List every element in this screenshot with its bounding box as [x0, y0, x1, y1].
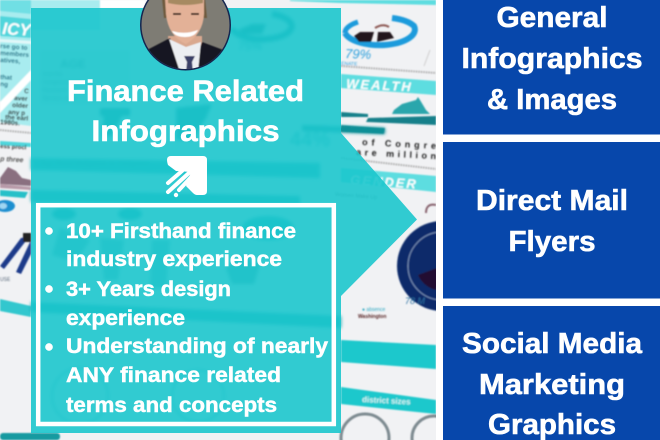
left top cyan block — [0, 0, 100, 126]
content under the teal panel: Congressional — [42, 80, 80, 86]
content under the teal panel: Service says — [42, 96, 76, 102]
bullet list: industry experience — [66, 248, 282, 271]
title: Finance Related — [67, 75, 304, 108]
background: blurred infographic collage: are million — [356, 147, 436, 161]
left column text: ng — [0, 81, 8, 89]
background: blurred infographic collage: 78 M — [405, 296, 426, 306]
background: blurred infographic collage: of Congre — [362, 137, 436, 151]
left column text: that — [0, 74, 13, 82]
left column text: aver — [14, 95, 28, 103]
panel: General Infographics and Images: General — [496, 2, 608, 34]
content under the teal panel: Top Three Religions in Congress — [40, 161, 150, 168]
photo: circular portrait — [140, 0, 232, 72]
panel: white outlined credentials box — [38, 205, 334, 424]
panel: General Infographics and Images: & Images — [487, 84, 617, 116]
content under the teal panel: 75% — [238, 39, 262, 53]
background: blurred infographic collage: ess procl — [0, 144, 27, 151]
dark pie — [396, 220, 436, 312]
background: blurred infographic collage: ● absence — [362, 307, 386, 313]
left column text: C — [24, 88, 29, 95]
left column text: members — [0, 50, 30, 59]
left column text: the earl — [5, 114, 29, 123]
panel: Social Media Marketing Graphics: Marketing — [479, 369, 625, 401]
capitol left — [0, 167, 31, 186]
capitol right — [341, 112, 368, 117]
bullet list: terms and concepts — [66, 394, 277, 417]
background: blurred infographic collage: district sizes — [362, 395, 411, 407]
panel: General Infographics and Images: Infographics — [462, 43, 642, 75]
title — [67, 75, 304, 148]
content under the teal panel: AGE — [60, 57, 86, 71]
panel: Direct Mail Flyers: Direct Mail — [476, 185, 628, 217]
right column: donut — [345, 18, 415, 45]
panel: Direct Mail Flyers: Flyers — [508, 226, 596, 258]
background: blurred infographic collage: USE — [0, 277, 11, 283]
left column text: 1980s. — [0, 119, 20, 127]
icon: arrow logo — [167, 156, 207, 197]
background: blurred infographic collage: WEALTH — [346, 76, 413, 94]
bullet list — [45, 220, 328, 417]
bullet list: Understanding of nearly — [66, 335, 328, 358]
background: blurred infographic collage: Women Make Up — [335, 192, 378, 201]
panel: Social Media Marketing Graphics: Social Media — [462, 328, 643, 360]
panel: Direct Mail Flyers — [443, 142, 660, 298]
left column text: any p — [8, 109, 25, 117]
background: blurred infographic collage: GENDER — [350, 172, 418, 192]
content under the teal panel: And the — [42, 72, 63, 78]
content under the teal panel — [28, 11, 388, 330]
background: blurred infographic collage: p three — [0, 156, 24, 164]
title: Infographics — [92, 115, 280, 148]
content under the teal panel: 44% — [290, 129, 330, 151]
background: blurred infographic collage: ICY — [2, 19, 33, 40]
background: blurred infographic collage: ENATE — [341, 61, 358, 68]
content under the teal panel: Research — [42, 88, 68, 94]
background: blurred infographic collage: Washington — [358, 314, 386, 320]
panel: teal arrow overlay — [31, 8, 417, 433]
background: blurred infographic collage: 79% — [345, 46, 371, 62]
people figures left — [0, 237, 29, 269]
bullet list: experience — [66, 307, 185, 330]
bullet list: 10+ Firsthand finance — [66, 220, 296, 243]
left column text: older — [12, 102, 29, 110]
bullet list: 3+ Years design — [66, 278, 231, 301]
background: blurred infographic collage — [0, 0, 436, 440]
left column text — [0, 43, 30, 127]
panel: General Infographics and Images — [443, 0, 660, 134]
left column text: rse go to — [0, 43, 28, 52]
left column text: atives, — [0, 57, 21, 65]
bullet list: ANY finance related — [66, 364, 281, 387]
panel: Social Media Marketing Graphics — [443, 306, 660, 440]
